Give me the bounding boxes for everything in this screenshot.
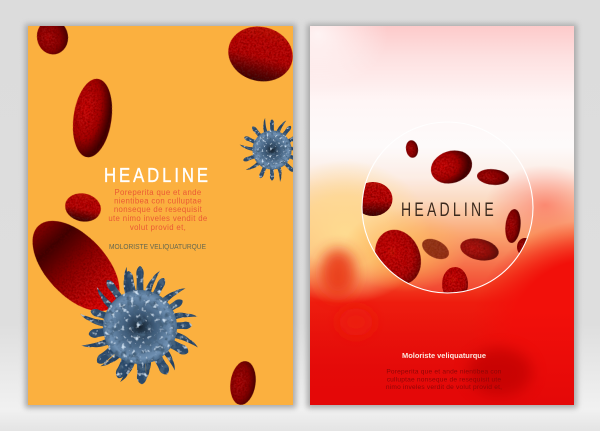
panel: orange brochure page <box>28 26 293 405</box>
text block: right body copy: nimo inveles verdit de volut provid et, <box>386 384 502 391</box>
blood cell: flat right <box>476 168 510 186</box>
text block: right body copy: culluptae nonseque de resequisit ute <box>387 376 501 384</box>
text block: right body copy <box>386 368 502 391</box>
text block: right subtitle: Moloriste veliquaturque <box>402 351 486 360</box>
text block: left body copy: ute nimo inveles vendit de <box>108 214 208 223</box>
blood cell: dark oval <box>460 238 499 261</box>
blood cell: right vertical <box>505 209 521 243</box>
blood cell: tall oval <box>72 78 112 158</box>
blood cell: large <box>32 220 120 312</box>
blood cell: tiny <box>406 140 418 158</box>
blurred background colour fields <box>310 26 574 398</box>
text block: left body copy: nientibea con culluptae <box>114 196 202 206</box>
heading: left headline: HEADLINE <box>104 165 211 187</box>
icon: small virus <box>240 118 293 182</box>
panel: red gradient brochure page <box>310 26 574 405</box>
blood cell: right edge <box>517 238 527 253</box>
blood cell: bottom right <box>230 360 256 405</box>
blood cell: small middle <box>64 193 102 222</box>
blood cell: bottom <box>442 267 468 292</box>
text block: left subtitle: MOLORISTE VELIQUATURQUE <box>109 242 206 251</box>
text block: left body copy: Poreperita que et ande <box>114 188 202 197</box>
icon: large virus <box>79 266 200 384</box>
text block: left body copy <box>108 188 208 232</box>
text block: right body copy: Poreperita que et ande nientibea con <box>386 368 502 376</box>
blood cell: large top <box>430 150 472 184</box>
blood cell: large lower <box>374 230 422 283</box>
blood cell: top right <box>228 26 293 82</box>
blood cell: translucent <box>422 238 450 260</box>
blood cell: top left <box>36 26 68 55</box>
text block: left body copy: volut provid et, <box>130 223 186 232</box>
circle lens with blood cells <box>361 140 534 294</box>
heading: right headline: HEADLINE <box>401 199 497 221</box>
white ring <box>361 151 534 294</box>
blood cell: left half <box>362 182 392 216</box>
text block: left body copy: nonseque de resequisit <box>114 205 203 214</box>
